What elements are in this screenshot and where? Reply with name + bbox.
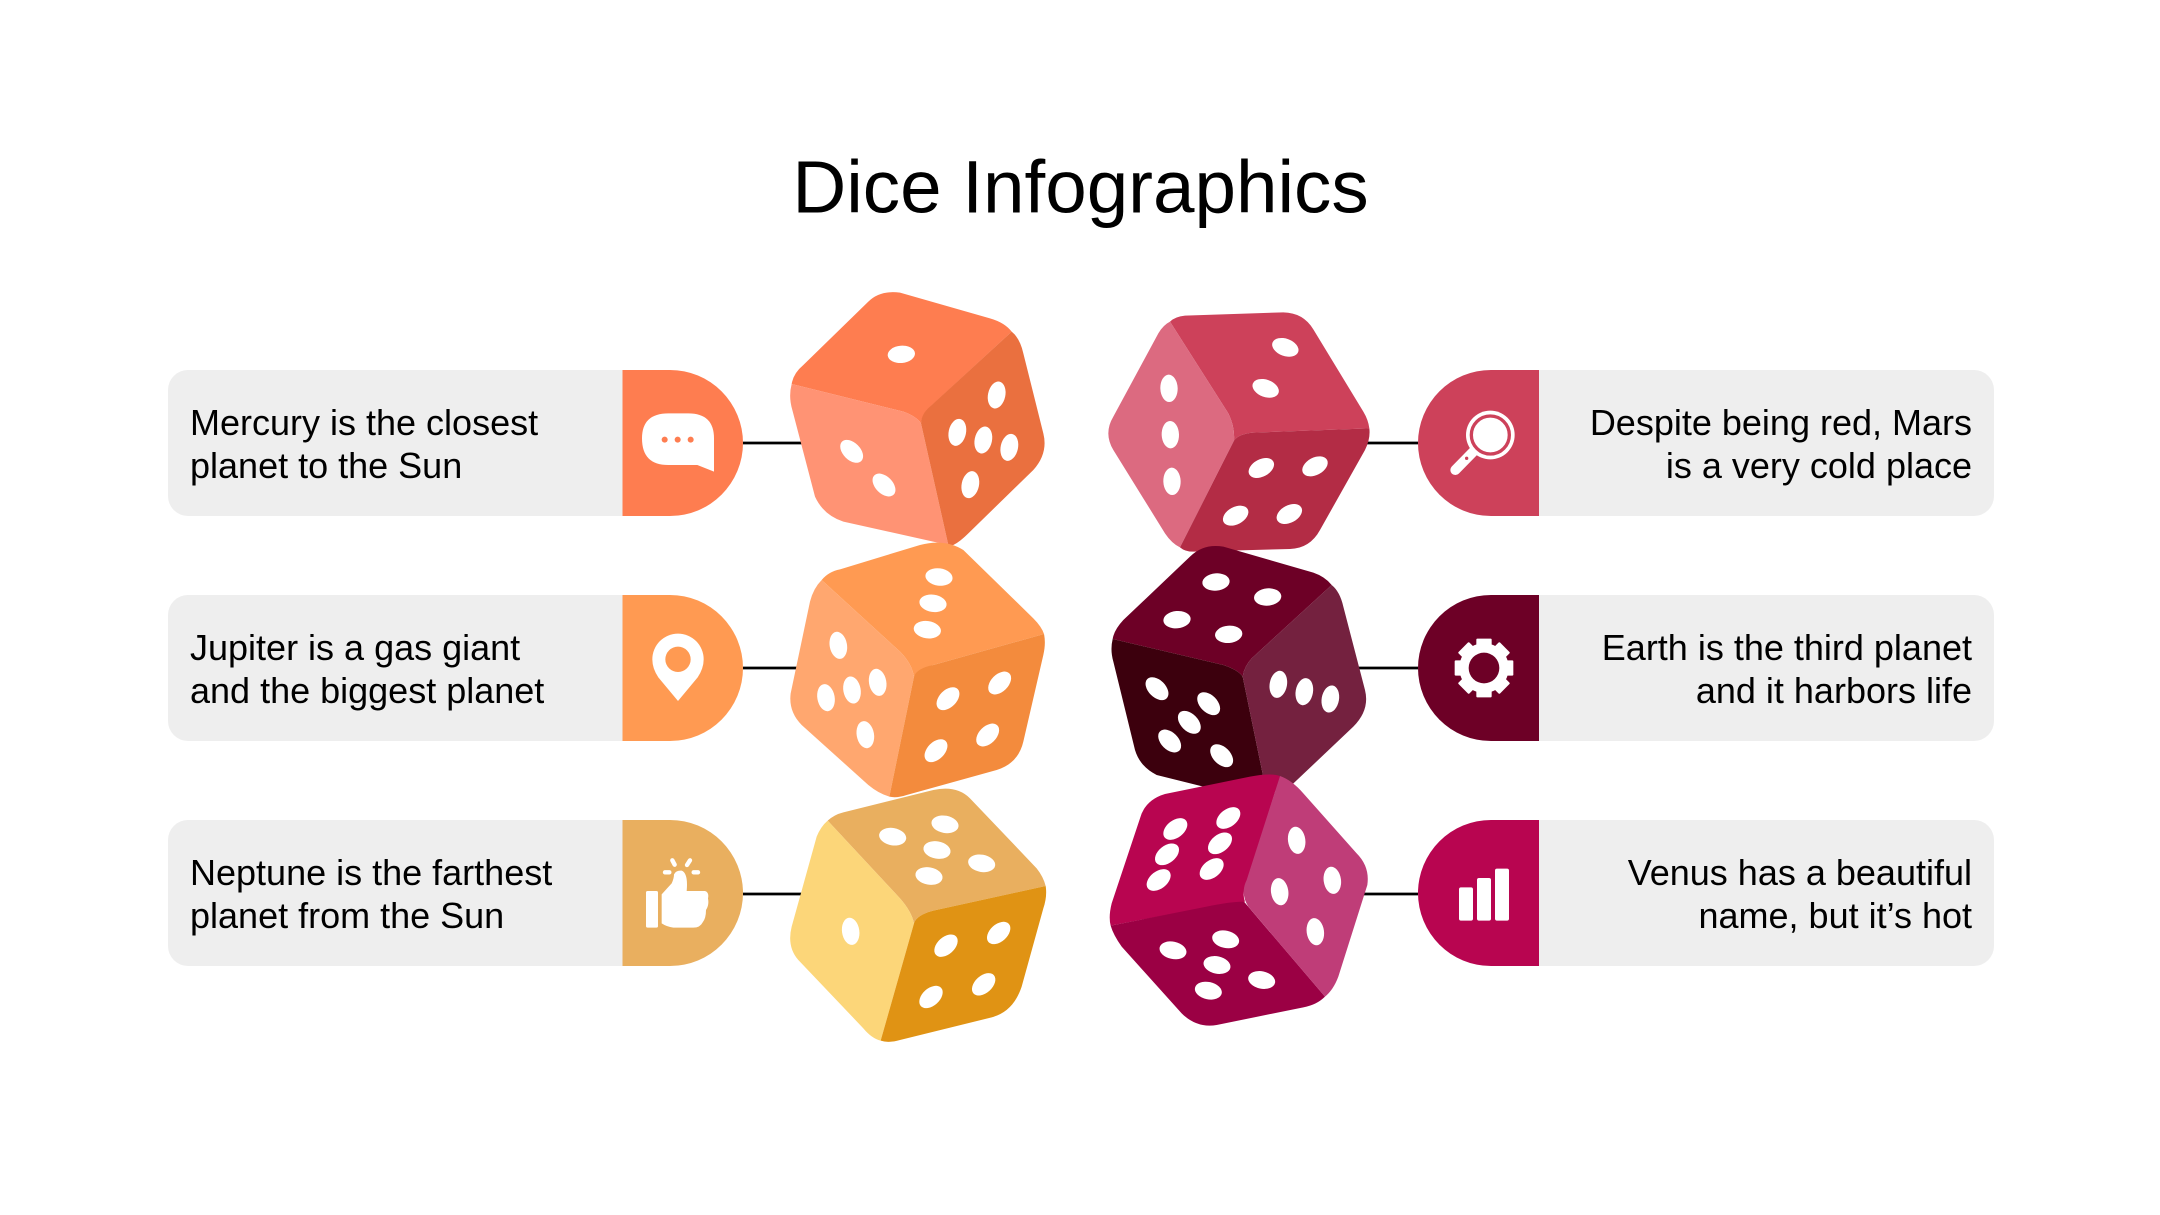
icon tab — [1418, 595, 1539, 741]
die: amber — [790, 789, 1046, 1042]
connector line — [1357, 667, 1418, 669]
icon: thumbs up — [646, 860, 708, 928]
text block: Mars: is a very cold place — [1666, 445, 1972, 486]
connector line — [743, 667, 798, 669]
text block: Mercury: planet to the Sun — [190, 445, 462, 486]
die: orange — [790, 543, 1045, 797]
die: red — [1108, 312, 1370, 552]
connector line — [743, 442, 802, 444]
text block: Jupiter: and the biggest planet — [190, 670, 544, 711]
panel: Mercury — [168, 370, 802, 516]
connector line — [1366, 442, 1418, 444]
icon: speech bubble — [642, 413, 714, 472]
panel background — [168, 820, 622, 966]
icon tab — [1418, 820, 1539, 966]
panel background — [168, 595, 622, 741]
title: Dice Infographics — [792, 144, 1369, 228]
icon tab — [622, 370, 743, 516]
icon: gear — [1455, 639, 1513, 697]
text block: Earth: Earth is the third planet — [1602, 627, 1972, 668]
text block: Neptune: planet from the Sun — [190, 895, 504, 936]
die: orange-red — [790, 292, 1045, 545]
panel: Jupiter — [168, 595, 798, 741]
text block: Earth: and it harbors life — [1696, 670, 1972, 711]
text block: Neptune: Neptune is the farthest — [190, 852, 552, 893]
connector line — [1364, 893, 1418, 895]
text block: Venus: name, but it’s hot — [1698, 895, 1972, 936]
text block: Venus: Venus has a beautiful — [1628, 852, 1972, 893]
panel background — [1539, 820, 1994, 966]
text block: Mars: Despite being red, Mars — [1590, 402, 1972, 443]
die: maroon — [1111, 546, 1366, 793]
die: magenta — [1110, 774, 1368, 1026]
icon: bar chart — [1459, 869, 1509, 921]
icon: magnifier — [1455, 411, 1515, 470]
icon tab — [1418, 370, 1539, 516]
panel background — [1539, 595, 1994, 741]
panel: Earth — [1357, 595, 1994, 741]
text block: Mercury: Mercury is the closest — [190, 402, 538, 443]
connector line — [743, 893, 802, 895]
panel: Venus — [1364, 820, 1994, 966]
text block: Jupiter: Jupiter is a gas giant — [190, 627, 520, 668]
icon: map pin — [652, 634, 704, 701]
panel background — [168, 370, 622, 516]
panel background — [1539, 370, 1994, 516]
panel: Mars — [1366, 370, 1994, 516]
panel: Neptune — [168, 820, 802, 966]
icon tab — [622, 595, 743, 741]
icon tab — [622, 820, 743, 966]
